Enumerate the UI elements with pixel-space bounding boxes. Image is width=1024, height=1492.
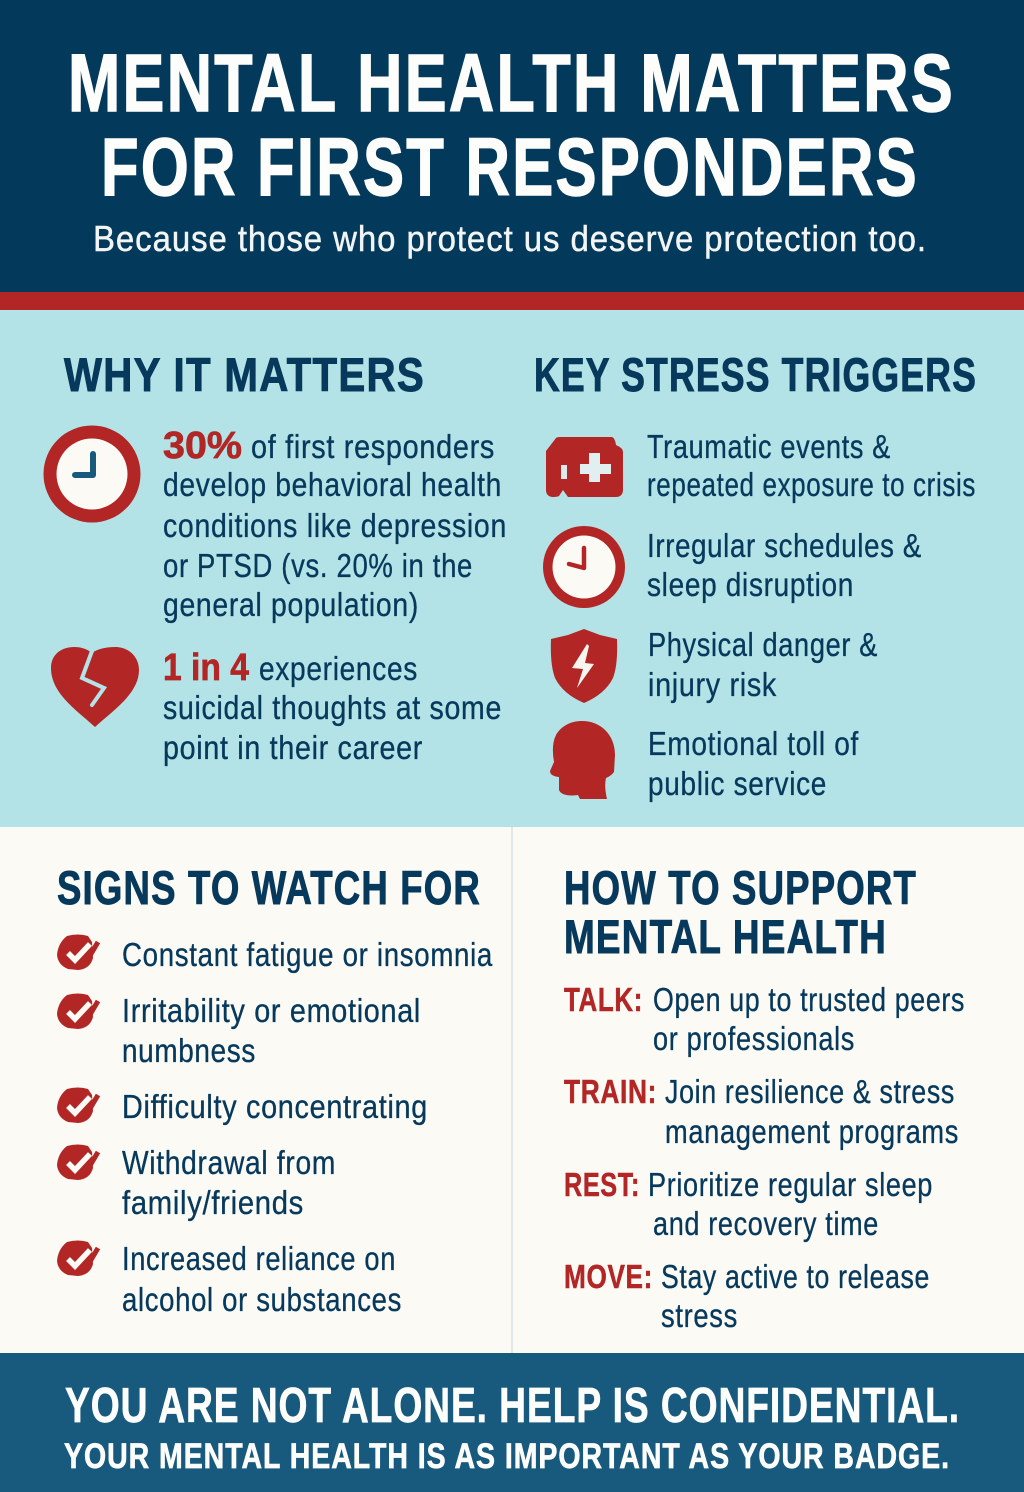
panel: why it matters and key stress triggers — [0, 310, 1024, 827]
stat: 30 percent — [163, 425, 507, 623]
tip: train: Join resilience & stress — [665, 1073, 955, 1110]
stat: 1 in 4 — [163, 647, 502, 766]
stat: 30 percent: conditions like depression — [163, 507, 507, 544]
stat: 1 in 4: point in their career — [163, 729, 423, 766]
stat: 30 percent: or PTSD (vs. 20% in the — [163, 547, 473, 584]
sign: fatigue: Constant fatigue or insomnia — [122, 936, 493, 973]
heading: how to support mental health: MENTAL HEALTH — [564, 910, 887, 963]
stat: 1 in 4: suicidal thoughts at some — [163, 689, 502, 726]
title — [68, 38, 955, 213]
tip: train: TRAIN: — [564, 1073, 657, 1110]
sign: withdrawal: Withdrawal from — [122, 1144, 336, 1181]
footer banner — [0, 1353, 1024, 1492]
tip: move: Stay active to release — [661, 1258, 930, 1295]
sign: irritability: numbness — [122, 1032, 256, 1069]
stat: 30 percent: 30% — [163, 425, 242, 467]
heading: why it matters: WHY IT MATTERS — [64, 348, 425, 401]
icon: broken heart — [51, 647, 139, 727]
tip: train: management programs — [665, 1113, 959, 1150]
icon: clock — [543, 526, 625, 608]
trigger: irregular schedules: Irregular schedules & — [647, 527, 922, 564]
sign: withdrawal — [57, 1144, 336, 1221]
sign: irritability — [57, 992, 421, 1069]
stat: 1 in 4: 1 in 4 — [163, 647, 249, 689]
trigger: physical danger: injury risk — [648, 666, 777, 703]
sign: withdrawal: family/friends — [122, 1184, 304, 1221]
sign: substances — [57, 1240, 402, 1318]
trigger: emotional toll — [648, 725, 859, 802]
trigger: physical danger — [648, 626, 878, 703]
tip: move: stress — [661, 1297, 738, 1334]
trigger: traumatic events: Traumatic events & — [647, 428, 891, 465]
stat: 1 in 4: experiences — [259, 650, 418, 687]
tip: rest: Prioritize regular sleep — [648, 1166, 933, 1203]
tip: train — [564, 1073, 959, 1150]
icon: head silhouette — [550, 721, 615, 799]
tip: talk: TALK: — [564, 981, 643, 1018]
icon: medical kit — [546, 437, 623, 497]
trigger: physical danger: Physical danger & — [648, 626, 878, 663]
subtitle: Because those who protect us deserve protection too. — [93, 218, 927, 259]
trigger: traumatic events — [647, 428, 976, 503]
sign: irritability: Irritability or emotional — [122, 992, 421, 1029]
trigger: irregular schedules — [647, 527, 922, 603]
panel: signs and support — [0, 827, 1024, 1353]
sign: concentration: Difficulty concentrating — [122, 1088, 428, 1125]
sign: substances: alcohol or substances — [122, 1281, 402, 1318]
red divider band — [0, 292, 1024, 310]
tip: rest — [564, 1166, 933, 1242]
stat: 30 percent: general population) — [163, 586, 419, 623]
stat: 30 percent: of first responders — [251, 428, 495, 465]
icon: clock — [44, 426, 140, 522]
tip: rest: REST: — [564, 1166, 640, 1203]
tip: talk — [564, 981, 965, 1057]
tip: move: MOVE: — [564, 1258, 653, 1295]
heading: signs to watch for: SIGNS TO WATCH FOR — [57, 861, 481, 914]
sign: substances: Increased reliance on — [122, 1240, 396, 1277]
tip: move — [564, 1258, 930, 1334]
tip: rest: and recovery time — [653, 1205, 879, 1242]
trigger: irregular schedules: sleep disruption — [647, 566, 854, 603]
icon: shield with lightning — [551, 629, 617, 703]
heading: how to support mental health — [564, 861, 917, 963]
trigger: emotional toll: public service — [648, 765, 827, 802]
stat: 30 percent: develop behavioral health — [163, 466, 502, 503]
tip: talk: or professionals — [653, 1020, 855, 1057]
heading: how to support mental health: HOW TO SUPPORT — [564, 861, 917, 914]
header banner — [0, 0, 1024, 292]
trigger: emotional toll: Emotional toll of — [648, 725, 859, 762]
